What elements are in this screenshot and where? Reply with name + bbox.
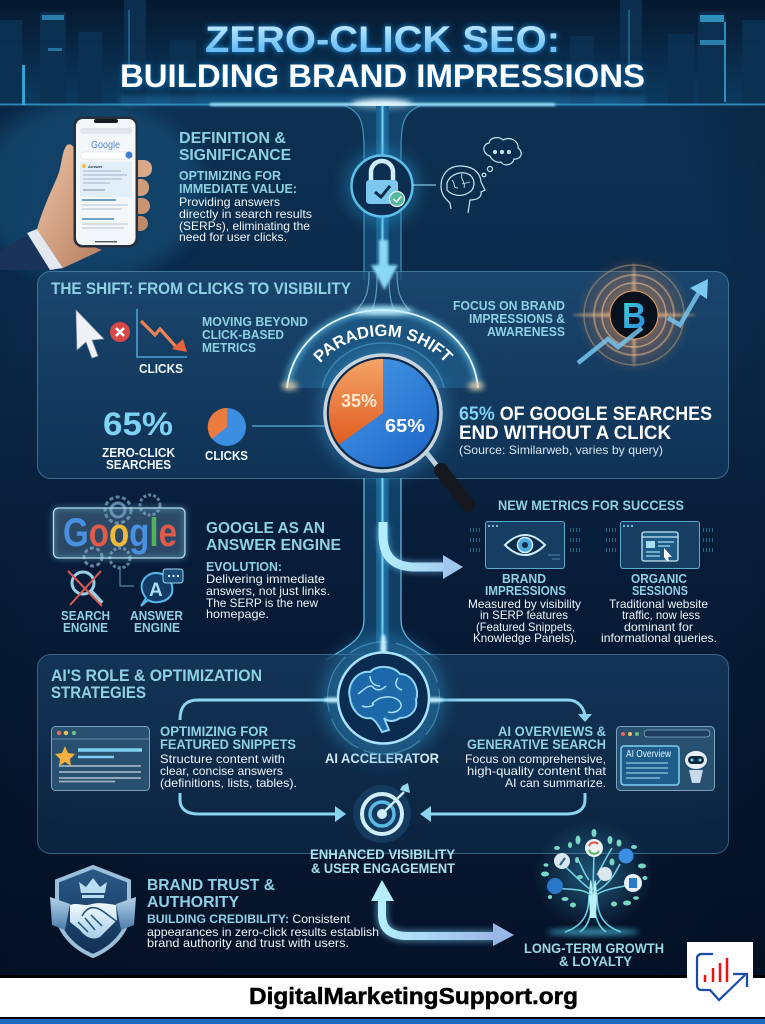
card: AI overview window with robot xyxy=(616,726,714,790)
text: brand impressions xyxy=(468,572,581,645)
section: brand trust and authority: AUTHORITY xyxy=(147,894,239,911)
text: google as an answer engine: GOOGLE AS AN xyxy=(206,520,325,537)
icon: padlock in glowing circle xyxy=(345,149,419,223)
icon: google search card: Google xyxy=(63,511,177,555)
text: google as an answer engine: homepage. xyxy=(206,607,269,621)
title: ZERO-CLICK SEO: xyxy=(205,19,560,60)
text: featured snippets: FEATURED SNIPPETS xyxy=(160,737,296,752)
stat: 65 percent zero-click xyxy=(102,406,175,472)
label: paradigm shift on arc: PARADIGM SHIFT xyxy=(313,324,454,362)
arrow: pipe to new metrics xyxy=(383,522,463,579)
icon: crossed search engine: SEARCH xyxy=(61,609,110,623)
chart: small pie: CLICKS xyxy=(205,449,248,463)
chart: falling clicks: CLICKS xyxy=(139,362,183,376)
panel: the shift from clicks to visibility xyxy=(37,260,729,479)
arrow: engagement to long-term growth xyxy=(371,880,514,946)
chart: small pie xyxy=(205,408,248,463)
section: new metrics for success xyxy=(468,497,717,645)
section: definition and significance: directly in search results xyxy=(179,207,312,221)
icon: head with brain and thought bubble xyxy=(441,138,521,213)
statistic headline: 65% OF GOOGLE SEARCHES xyxy=(459,404,712,425)
text: AI overviews: AI can summarize. xyxy=(505,776,606,790)
stat: 65 percent zero-click: ZERO-CLICK xyxy=(102,446,175,460)
arrowheads xyxy=(335,714,592,822)
text: AI overviews: GENERATIVE SEARCH xyxy=(467,737,606,752)
text: moving beyond click-based metrics: MOVING BEYOND xyxy=(202,314,308,329)
icon: answer engine bubble: ANSWER xyxy=(130,609,183,623)
tree leaves xyxy=(541,829,648,908)
statistic headline: END WITHOUT A CLICK xyxy=(459,423,671,444)
text: brand impressions: (Featured Snippets, xyxy=(476,620,575,634)
section: definition and significance: IMMEDIATE VALUE: xyxy=(179,182,297,196)
icon: cursor with red cross xyxy=(76,310,130,358)
footer website text: DigitalMarketingSupport.org xyxy=(249,983,578,1009)
section: google as an answer engine xyxy=(54,495,341,635)
text: AI overviews: Focus on comprehensive, xyxy=(465,752,606,766)
divider glow right xyxy=(478,387,712,389)
card: featured snippet window xyxy=(52,726,150,790)
icon: hand holding phone xyxy=(0,116,152,270)
label: long-term growth and loyalty xyxy=(524,941,664,969)
section: definition and significance: SIGNIFICANCE xyxy=(179,147,291,164)
panel: AI's role and optimization strategies xyxy=(38,654,728,854)
text: google as an answer engine: ANSWER ENGINE xyxy=(206,537,341,554)
title: BUILDING BRAND IMPRESSIONS xyxy=(120,58,645,94)
label: enhanced visibility and user engagement: & USER ENGAGEMENT xyxy=(311,860,455,876)
statistic headline xyxy=(459,404,712,457)
pipe flare above dome xyxy=(356,272,410,311)
text: organic sessions: informational queries. xyxy=(601,631,717,645)
connector: small pie to magnifier xyxy=(252,425,326,427)
text: brand impressions: IMPRESSIONS xyxy=(485,584,566,598)
card: brand impressions xyxy=(470,522,582,568)
text: organic sessions xyxy=(601,572,717,645)
title: ZERO-CLICK SEO: xyxy=(205,19,560,60)
connector: lock to head xyxy=(412,184,436,186)
phone body xyxy=(74,116,138,248)
section: brand trust and authority: brand authority and trust with users. xyxy=(147,936,349,950)
icon: growth tree xyxy=(533,821,653,936)
text: organic sessions: traffic, now less xyxy=(622,608,700,622)
label: enhanced visibility and user engagement: ENHANCED VISIBILITY xyxy=(310,846,456,862)
section: definition and significance: OPTIMIZING FOR xyxy=(179,169,281,183)
header skyline band xyxy=(0,0,765,109)
section: brand trust and authority xyxy=(147,877,379,950)
text: featured snippets: (definitions, lists, tables). xyxy=(160,776,297,790)
text: brand impressions: BRAND xyxy=(502,572,546,586)
text: organic sessions: ORGANIC xyxy=(631,572,687,586)
icon: answer engine bubble xyxy=(130,569,183,635)
text: brand impressions: Measured by visibility xyxy=(468,597,581,611)
text: google as an answer engine: answers, not just links. xyxy=(206,584,330,598)
section: definition and significance: (SERPs), eliminating the xyxy=(179,219,310,233)
central light pipe, middle section xyxy=(326,478,440,660)
icon: brand badge with rising arrow xyxy=(572,257,708,373)
text: featured snippets xyxy=(160,724,297,790)
icon: target with arrow xyxy=(353,783,411,843)
section: definition and significance: Providing answers xyxy=(179,195,280,209)
text: google as an answer engine: EVOLUTION: xyxy=(206,560,282,574)
text: AI overviews xyxy=(465,724,607,790)
dome arch xyxy=(282,307,484,390)
icon: crossed search engine xyxy=(61,571,110,635)
text: moving beyond click-based metrics xyxy=(202,314,308,355)
heading: new metrics: NEW METRICS FOR SUCCESS xyxy=(498,497,684,513)
heading: AI's role: STRATEGIES xyxy=(51,684,146,702)
icon: crossed search engine: ENGINE xyxy=(63,621,108,635)
stat: 65 percent zero-click: 65% xyxy=(103,406,173,442)
label: enhanced visibility and user engagement xyxy=(310,846,456,876)
text: organic sessions: SESSIONS xyxy=(632,584,688,598)
phone body: Google xyxy=(91,140,120,151)
text: brand impressions: Knowledge Panels). xyxy=(473,631,577,645)
section: definition and significance xyxy=(179,130,312,244)
text: brand impressions: in SERP features xyxy=(480,608,568,622)
text: featured snippets: OPTIMIZING FOR xyxy=(160,724,268,739)
section: definition and significance: need for user clicks. xyxy=(179,230,287,244)
text: featured snippets: Structure content with xyxy=(160,752,285,766)
icon: brand badge with rising arrow: B xyxy=(622,295,646,336)
text: AI overviews: high-quality content that xyxy=(467,764,607,778)
text: focus on brand impressions: AWARENESS xyxy=(487,324,565,339)
central light pipe, upper section xyxy=(345,106,420,280)
card: organic sessions xyxy=(606,522,714,568)
arrow: pipe into panel xyxy=(371,240,398,290)
logo xyxy=(687,942,753,1000)
text: focus on brand impressions xyxy=(453,298,565,339)
text: featured snippets: clear, concise answers xyxy=(160,764,283,778)
section: brand trust and authority: BUILDING CREDIBILITY: Consistent xyxy=(147,912,351,926)
text: organic sessions: Traditional website xyxy=(609,597,708,611)
magnifier with pie chart xyxy=(319,349,468,505)
divider glow xyxy=(55,387,290,389)
stat: 65 percent zero-click: SEARCHES xyxy=(106,458,171,472)
title xyxy=(120,19,645,94)
text: focus on brand impressions: IMPRESSIONS & xyxy=(469,311,565,326)
text: google as an answer engine: Delivering immediate xyxy=(206,572,325,586)
card: AI overview window with robot: AI Overview xyxy=(626,749,672,760)
section: brand trust and authority: BRAND TRUST & xyxy=(147,877,275,894)
text: AI overviews: AI OVERVIEWS & xyxy=(498,724,606,739)
section: definition and significance: DEFINITION & xyxy=(179,130,286,147)
icon: shield with crown and handshake xyxy=(50,867,136,956)
heading: AI's role: AI'S ROLE & OPTIMIZATION xyxy=(51,667,262,685)
heading: AI's role xyxy=(51,667,262,702)
statistic headline: (Source: Similarweb, varies by query) xyxy=(459,443,663,457)
label: AI accelerator: AI ACCELERATOR xyxy=(325,750,439,766)
label: long-term growth and loyalty: & LOYALTY xyxy=(559,954,632,969)
text: moving beyond click-based metrics: CLICK-BASED xyxy=(202,327,284,342)
section: brand trust and authority: appearances in zero-click results establish xyxy=(147,925,379,939)
heading: the shift: THE SHIFT: FROM CLICKS TO VISIBILITY xyxy=(51,280,351,298)
label: long-term growth and loyalty: LONG-TERM GROWTH xyxy=(524,941,664,956)
chart: falling clicks xyxy=(137,309,187,376)
icon: answer engine bubble: A xyxy=(149,580,163,601)
text: google as an answer engine xyxy=(206,520,341,621)
magnifier with pie chart: 35% xyxy=(341,391,377,411)
phone body: Answer xyxy=(88,164,103,169)
text: focus on brand impressions: FOCUS ON BRAND xyxy=(453,298,565,313)
flow lines and arrows xyxy=(180,700,585,814)
icon: gears xyxy=(84,495,160,586)
footer band xyxy=(0,975,765,1024)
icon: AI brain circle xyxy=(322,634,446,760)
text: google as an answer engine: The SERP is the new xyxy=(206,596,318,610)
magnifier with pie chart: 65% xyxy=(385,416,425,436)
text: organic sessions: dominant for xyxy=(624,620,693,634)
icon: answer engine bubble: ENGINE xyxy=(134,621,180,635)
tree icon circles xyxy=(547,839,642,894)
text: moving beyond click-based metrics: METRICS xyxy=(202,340,256,355)
title: BUILDING BRAND IMPRESSIONS xyxy=(120,58,645,94)
